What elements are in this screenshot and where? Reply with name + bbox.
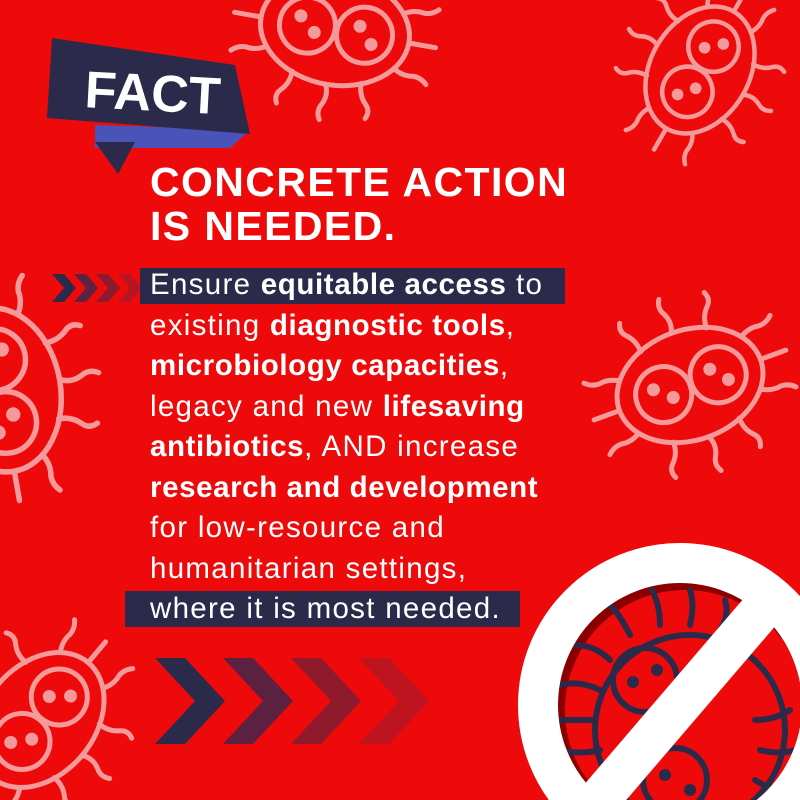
prohibition sign with bacteria <box>518 543 800 800</box>
small chevrons <box>52 274 140 302</box>
body text: humanitarian settings, <box>150 552 467 584</box>
body text: where it is most needed. <box>150 592 501 625</box>
title: IS NEEDED. <box>150 203 396 249</box>
highlight band line 1 <box>140 268 565 304</box>
FACT badge <box>47 38 250 174</box>
body text: research and development <box>150 470 538 504</box>
body text: Ensure equitable access to <box>150 268 543 301</box>
body text: legacy and new lifesaving <box>150 390 525 422</box>
FACT badge: FACT <box>83 61 222 126</box>
body text <box>150 268 543 625</box>
body text: microbiology capacities, <box>150 349 509 382</box>
big chevrons <box>155 658 429 744</box>
title <box>150 159 568 249</box>
body text: existing diagnostic tools, <box>150 308 515 342</box>
title: CONCRETE ACTION <box>150 159 568 205</box>
body text: for low-resource and <box>150 511 445 544</box>
body text: antibiotics, AND increase <box>150 430 519 463</box>
highlight band last line <box>125 591 520 627</box>
